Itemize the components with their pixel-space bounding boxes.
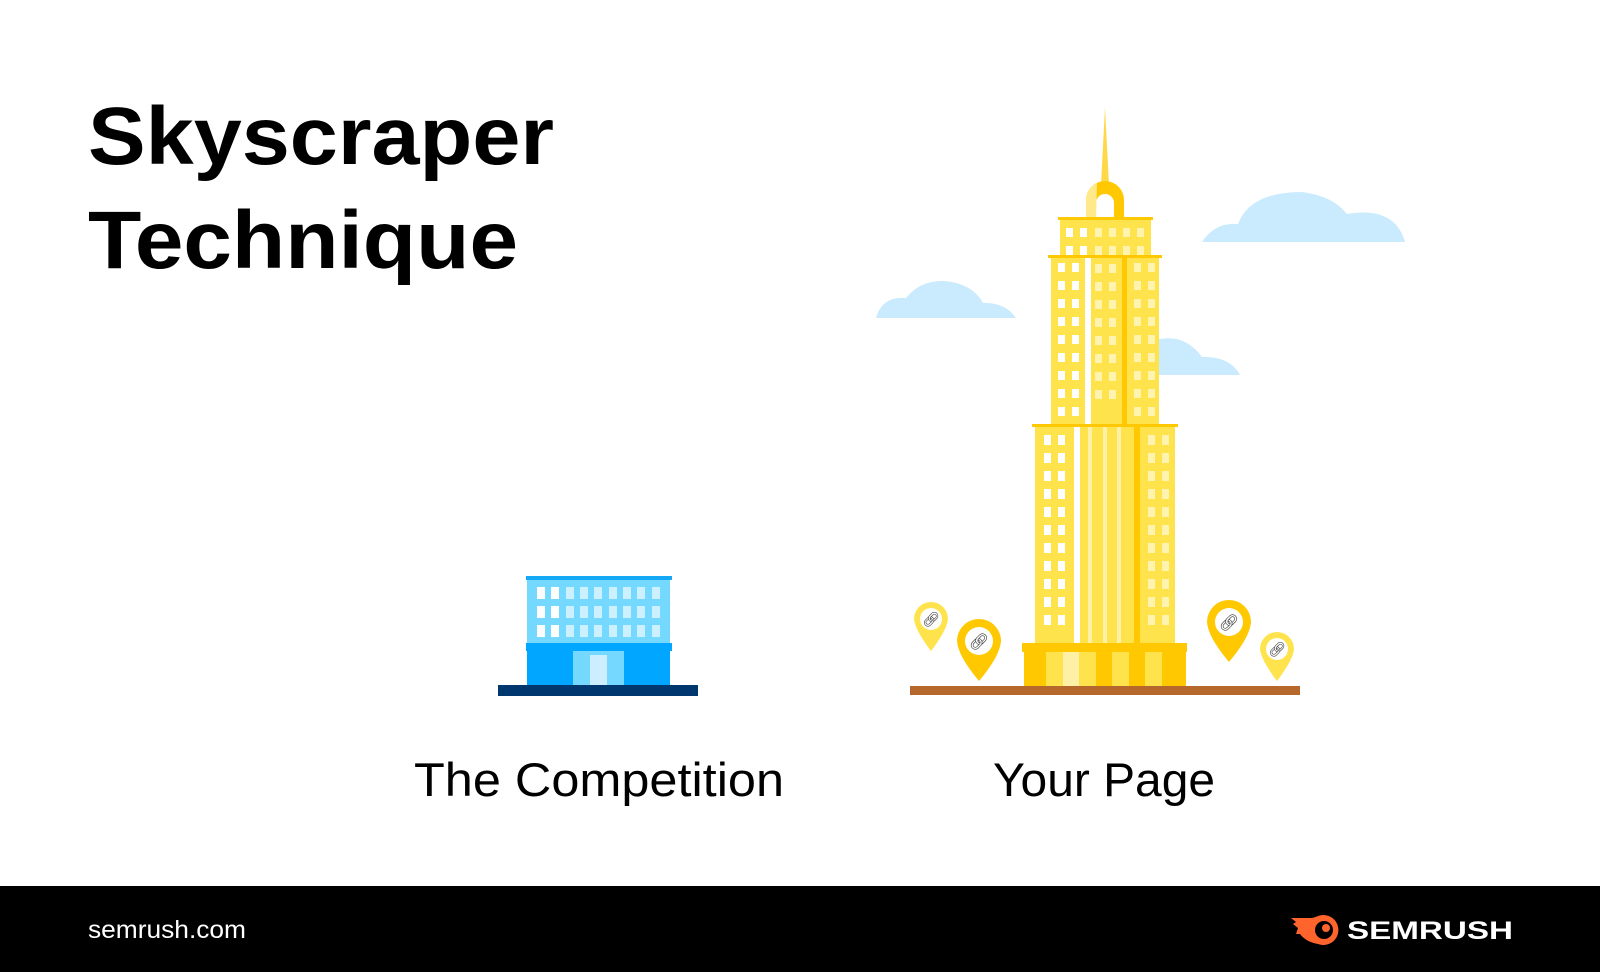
label: your page: Your Page <box>993 753 1215 806</box>
logo: semrush: SEMRUSH <box>1347 917 1513 945</box>
title <box>88 91 554 286</box>
icon: link pin large right: 🔗︎ <box>1219 614 1239 632</box>
competition building <box>498 576 698 696</box>
title: Skyscraper <box>88 91 554 182</box>
icon: link pin small left: 🔗︎ <box>922 611 940 627</box>
skyscraper <box>1022 107 1187 686</box>
footer url: semrush.com <box>88 916 246 944</box>
icon: link pin small right: 🔗︎ <box>1268 641 1286 657</box>
cloud: right <box>1202 192 1405 242</box>
icon: link pin small right <box>1260 632 1294 681</box>
cloud: left <box>876 281 1016 318</box>
icon: link pin large left: 🔗︎ <box>969 633 989 651</box>
ground <box>910 686 1300 695</box>
title: Technique <box>88 195 518 286</box>
cloud: middle <box>1150 338 1240 375</box>
logo: semrush <box>1291 915 1513 945</box>
footer <box>0 886 1600 972</box>
windows <box>1044 228 1087 625</box>
icon: link pin large right <box>1207 600 1251 662</box>
label: the competition: The Competition <box>414 753 784 806</box>
icon: link pin small left <box>914 602 948 651</box>
icon: link pin large left <box>957 619 1001 681</box>
